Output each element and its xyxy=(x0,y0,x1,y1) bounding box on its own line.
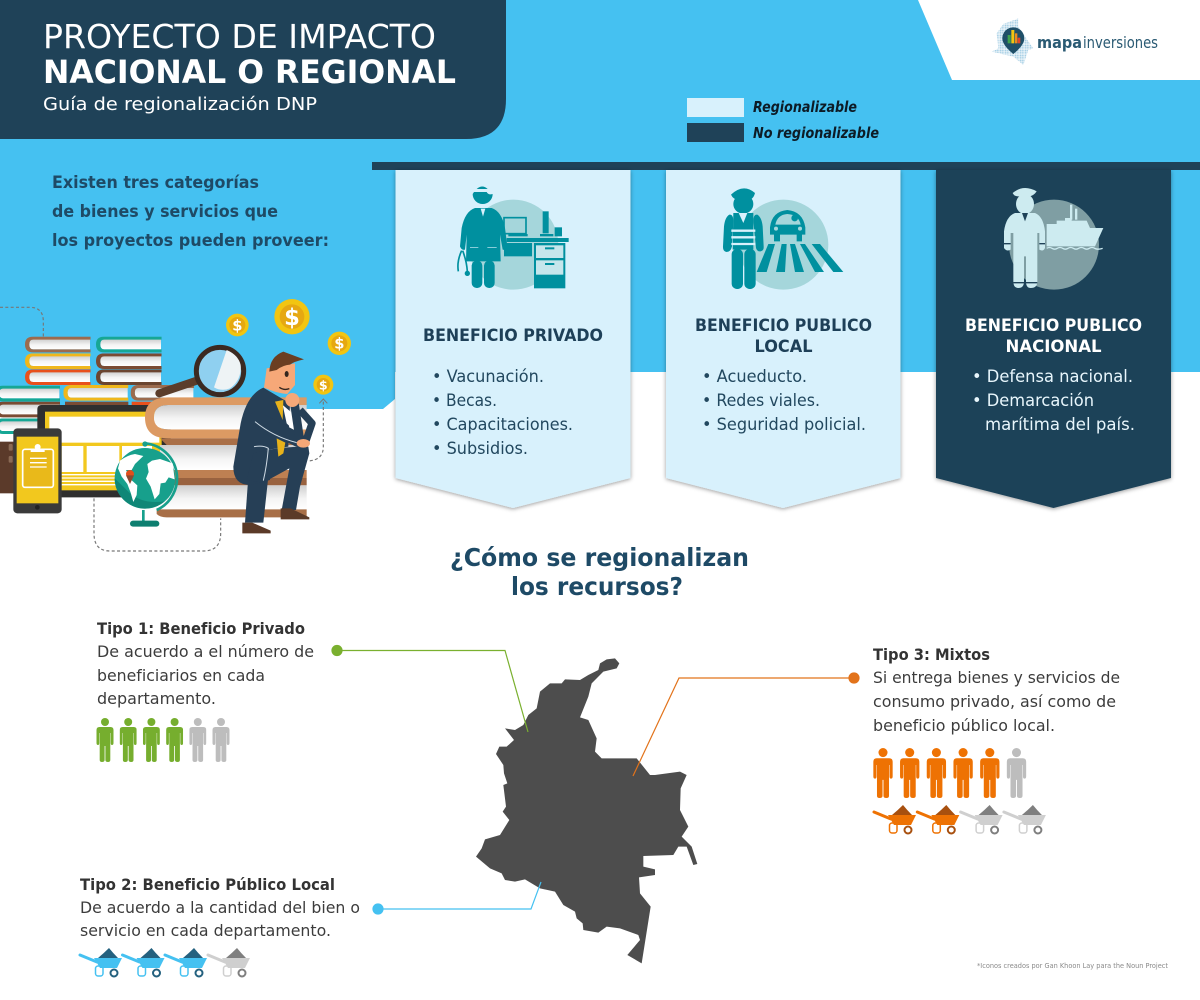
section heading xyxy=(450,543,749,601)
background: blue band xyxy=(0,0,1200,409)
card list: • Capacitaciones. xyxy=(432,415,573,435)
illustration: man with books and coins xyxy=(0,299,351,551)
card heading xyxy=(695,316,872,357)
card heading: NACIONAL xyxy=(1006,337,1102,357)
tablet xyxy=(37,405,171,497)
tipo 1 block: beneficiarios en cada xyxy=(97,666,265,685)
tipo 3 block: Tipo 3: Mixtos xyxy=(873,645,990,664)
coins xyxy=(226,299,351,395)
magnifier xyxy=(159,347,244,395)
globe xyxy=(115,441,177,527)
logo: wordmark xyxy=(1037,33,1158,52)
card list: marítima del país. xyxy=(985,415,1135,435)
icon: doctor xyxy=(458,186,569,290)
tipo 1 block: De acuerdo a el número de xyxy=(97,642,314,661)
logo panel xyxy=(918,0,1200,80)
man in suit xyxy=(233,352,312,533)
tipo 2 block: De acuerdo a la cantidad del bien o xyxy=(80,898,360,917)
card heading: BENEFICIO PUBLICO xyxy=(965,316,1142,336)
legend: Regionalizable xyxy=(753,98,857,116)
coins: $ xyxy=(284,305,300,331)
tipo 3 block xyxy=(873,645,1120,834)
title line 2: NACIONAL O REGIONAL xyxy=(43,53,456,91)
card heading xyxy=(965,316,1142,357)
legend xyxy=(687,98,879,142)
intro text: de bienes y servicios que xyxy=(52,202,278,222)
wheelbarrow icons xyxy=(874,805,1046,834)
map of Colombia xyxy=(476,658,697,963)
people icons xyxy=(96,718,230,762)
big books xyxy=(145,397,307,517)
tipo 2 block: servicio en cada departamento. xyxy=(80,921,331,940)
card list xyxy=(702,367,866,435)
connector: tipo 2 xyxy=(373,882,541,914)
header bar xyxy=(372,162,1200,170)
subtitle: Guía de regionalización DNP xyxy=(43,94,317,115)
tipo 3 block: consumo privado, así como de xyxy=(873,692,1116,711)
logo: wordmark: mapa xyxy=(1037,33,1082,52)
tipo 1 block: departamento. xyxy=(97,689,216,708)
tipo 1 block: Tipo 1: Beneficio Privado xyxy=(97,619,305,638)
card list: • Defensa nacional. xyxy=(972,367,1133,387)
people icons xyxy=(873,748,1026,798)
panel: beneficio privado xyxy=(396,170,630,508)
card heading: BENEFICIO PUBLICO xyxy=(695,316,872,336)
title line 1: PROYECTO DE IMPACTO xyxy=(43,17,436,56)
intro text xyxy=(52,173,329,251)
card list: • Seguridad policial. xyxy=(702,415,866,435)
section heading: los recursos? xyxy=(511,572,683,601)
logo: wordmark: inversiones xyxy=(1083,33,1158,52)
coins: $ xyxy=(232,317,242,334)
tipo 3 block: beneficio público local. xyxy=(873,716,1055,735)
card list: • Redes viales. xyxy=(702,391,820,411)
card list: • Vacunación. xyxy=(432,367,544,387)
card list xyxy=(432,367,573,459)
card heading: LOCAL xyxy=(754,337,813,357)
icon: police officer xyxy=(723,188,843,290)
section heading: ¿Cómo se regionalizan xyxy=(450,543,749,572)
brown case xyxy=(0,442,17,493)
legend: No regionalizable xyxy=(753,124,879,142)
card heading: BENEFICIO PRIVADO xyxy=(423,326,603,346)
title panel xyxy=(0,0,506,139)
wheelbarrow icons xyxy=(80,948,250,976)
connector: tipo 1 xyxy=(332,646,528,732)
card list: • Acueducto. xyxy=(702,367,807,387)
panel: beneficio publico nacional xyxy=(936,170,1171,508)
phone xyxy=(13,428,62,513)
panel: beneficio publico local xyxy=(666,170,900,508)
intro text: los proyectos pueden proveer: xyxy=(52,231,329,251)
card list: • Subsidios. xyxy=(432,439,528,459)
card list: • Becas. xyxy=(432,391,497,411)
tipo 2 block xyxy=(80,875,360,976)
logo: map pin xyxy=(992,18,1033,65)
connector: tipo 3 xyxy=(633,673,859,776)
tipo 3 block: Si entrega bienes y servicios de xyxy=(873,668,1120,687)
coins: $ xyxy=(334,336,344,353)
icon: naval officer xyxy=(1004,188,1103,290)
card list: • Demarcación xyxy=(972,391,1094,411)
coins: $ xyxy=(319,377,328,392)
tipo 1 block xyxy=(96,619,314,762)
intro text: Existen tres categorías xyxy=(52,173,259,193)
card list xyxy=(972,367,1135,435)
book stacks xyxy=(0,337,194,434)
tipo 2 block: Tipo 2: Beneficio Público Local xyxy=(80,875,335,894)
footnote: *Iconos creados por Gan Khoon Lay para the Noun Project xyxy=(977,962,1168,970)
